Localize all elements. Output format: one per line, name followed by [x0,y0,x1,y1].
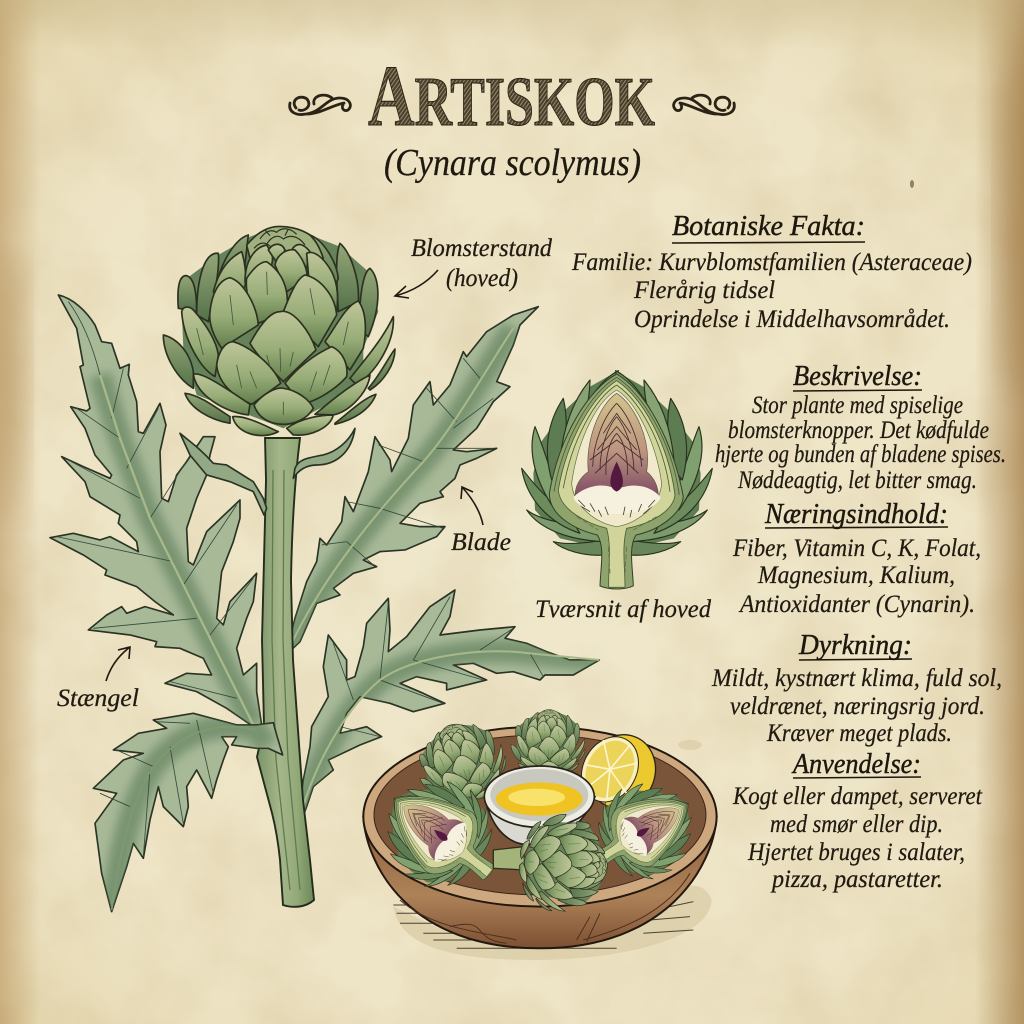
panel: Beskrivelse: Beskrivelse: [793,360,922,392]
label: Blade: Blade [451,529,511,556]
ornament: right flourish [674,95,734,115]
panel: Anvendelse: Anvendelse: [791,748,921,780]
panel: Botaniske Fakta: Oprindelse i Middelhavsområdet. [634,306,950,333]
stem [257,438,314,907]
leaf: lower right [297,590,599,833]
panel: Botaniske Fakta: Flerårig tidsel [633,277,775,304]
panel: Næringsindhold: Næringsindhold: [764,498,948,530]
panel: Anvendelse: Hjertet bruges i salater, [747,839,965,866]
ornament: left flourish [290,95,350,115]
panel: Anvendelse: Kogt eller dampet, serveret [732,783,983,810]
label: Blomsterstand [395,235,552,298]
panel: Dyrkning: Dyrkning: [798,629,912,661]
artichoke half: left [361,756,523,916]
leaf: upper left [50,295,262,727]
flower head [163,226,395,436]
panel: Botaniske Fakta: Familie: Kurvblomstfamilien (Asteraceae) [571,249,972,276]
botanical plant illustration [50,226,599,912]
panel: Næringsindhold: Magnesium, Kalium, [757,562,955,589]
panel: Botaniske Fakta: Botaniske Fakta: [672,210,865,242]
cross-section of head [522,371,712,589]
panel: Dyrkning: Kræver meget plads. [766,720,952,747]
artichoke half: right [571,763,714,902]
panel: Næringsindhold: Antioxidanter (Cynarin). [738,591,975,618]
wooden bowl [363,727,717,948]
panel: Næringsindhold: Fiber, Vitamin C, K, Folat, [732,535,981,562]
dip bowl [484,766,595,844]
leaf: upper right [287,307,538,654]
panel: Beskrivelse: Nøddeagtig, let bitter smag. [737,467,977,494]
panel: Næringsindhold [732,498,981,618]
bowl with artichokes [361,710,717,960]
artichoke: front [493,811,612,915]
lemon half [570,725,666,818]
panel: Botaniske Fakta [571,210,972,333]
panel: Beskrivelse: Stor plante med spiselige [752,392,963,419]
subtitle: (Cynara scolymus) [384,142,641,184]
label: Blomsterstand: Blomsterstand [411,235,552,262]
label: Stængel [57,647,139,712]
artichoke: back left [407,712,515,815]
panel: Anvendelse: med smør eller dip. [770,811,943,838]
small leaf left [180,433,267,515]
bowl shadow [393,885,712,960]
panel: Anvendelse [732,748,983,893]
panel: Dyrkning: veldrænet, næringsrig jord. [730,693,985,720]
panel: Dyrkning: Mildt, kystnært klima, fuld sol, [711,665,1002,692]
leaf: lower left [93,713,283,912]
heading: Artiskok: ARTISKOK [368,47,655,144]
panel: Dyrkning [711,629,1002,747]
label: Tværsnit af hoved: Tværsnit af hoved [535,596,711,623]
title [290,47,734,184]
label: Stængel: Stængel [57,685,139,712]
panel: Anvendelse: pizza, pastaretter. [770,866,943,893]
artichoke: back centre [511,710,585,777]
label: Blade [451,487,511,556]
label: Blomsterstand: (hoved) [446,265,518,292]
panel: Beskrivelse [715,360,1006,494]
small leaf right [293,428,355,478]
